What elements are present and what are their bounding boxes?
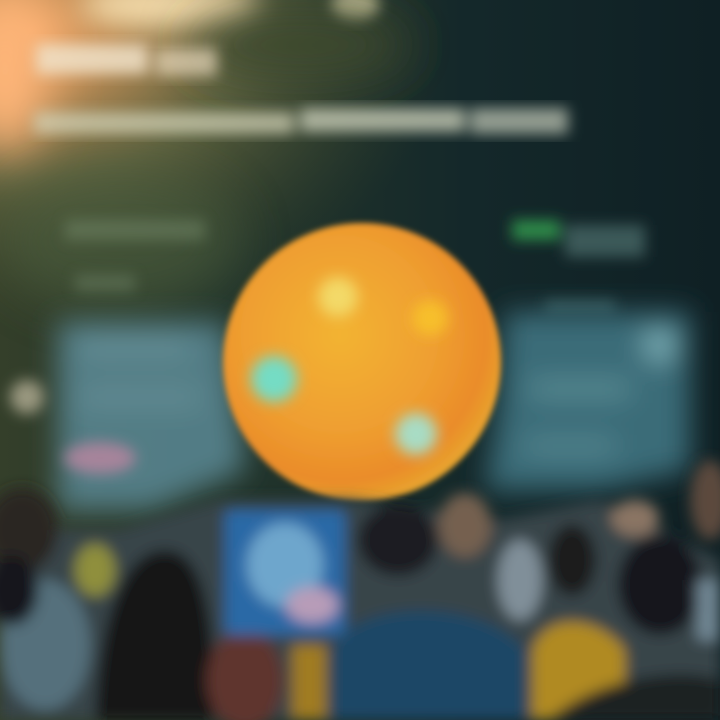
panel: left text lines bbox=[65, 220, 205, 291]
icon: teal spot bbox=[251, 356, 297, 402]
icon: small left marker bbox=[10, 380, 136, 474]
title: blurred heading bbox=[36, 44, 217, 76]
panel: left blue card bbox=[58, 322, 245, 510]
sphere: glowing orange ball bbox=[223, 223, 501, 501]
subtitle: blurred text line bbox=[34, 108, 568, 134]
icon: orange spot bbox=[412, 300, 448, 336]
icon: pale yellow spot bbox=[318, 277, 358, 317]
panel: right teal card bbox=[485, 312, 690, 490]
crowd: silhouettes of people bbox=[0, 460, 720, 720]
panel: right text lines bbox=[512, 220, 645, 314]
icon: pale teal spot bbox=[395, 413, 437, 455]
